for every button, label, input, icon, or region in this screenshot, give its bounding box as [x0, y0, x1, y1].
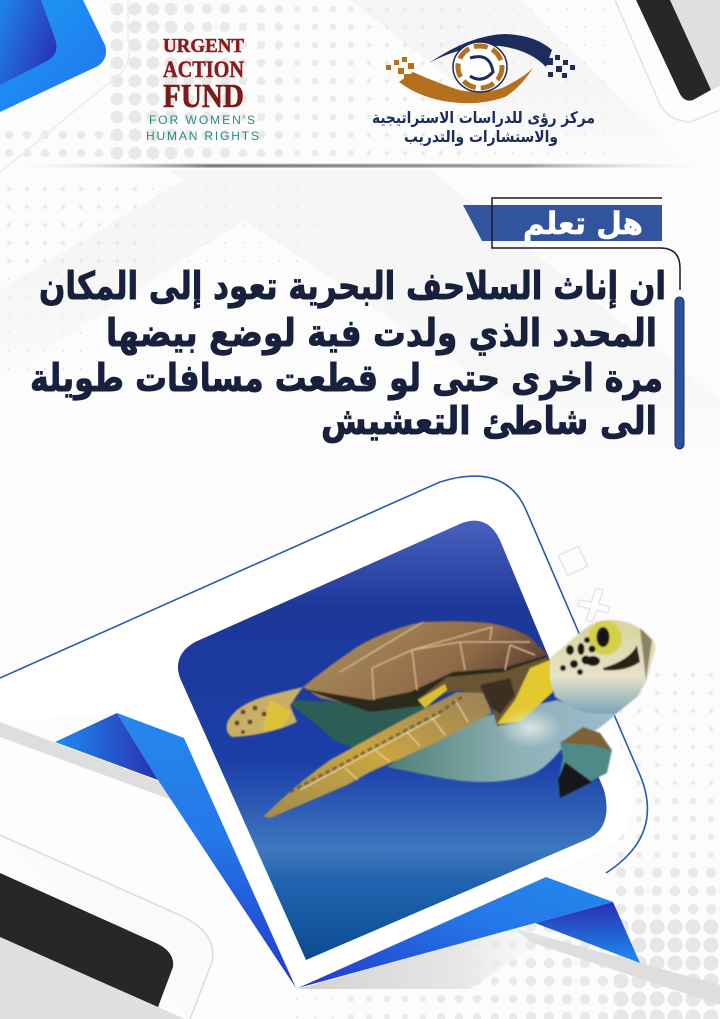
logo caption [372, 108, 595, 146]
logo: Urgent Action Fund [146, 35, 259, 143]
decorative outline shapes [558, 546, 610, 622]
logo: Urgent Action Fund: ACTION [163, 57, 244, 82]
belly [387, 700, 617, 782]
heading banner: did you know: هل تعلم [523, 206, 643, 242]
right blue folds [298, 877, 640, 988]
far front flipper [558, 727, 612, 798]
background diagonal bands [0, 0, 720, 460]
head [550, 620, 655, 714]
shell [303, 621, 548, 712]
logo: Urgent Action Fund: URGENT [163, 35, 245, 57]
logo: Urgent Action Fund: HUMAN RIGHTS [146, 129, 259, 143]
left blue folds [55, 713, 296, 988]
logo caption: مركز رؤى للدراسات الاستراتيجية [372, 108, 595, 127]
top-right corner shape [615, 0, 720, 122]
logo: Urgent Action Fund: FUND [163, 78, 244, 115]
logo: Urgent Action Fund: FOR WOMEN'S [149, 113, 255, 127]
white photo frame [0, 476, 633, 988]
front flipper [263, 692, 492, 818]
hind body underside [285, 700, 440, 748]
photo panel: blue sea [178, 521, 607, 960]
bottom-left white panel and dark shape [0, 737, 296, 1019]
turtle illustration [227, 620, 655, 818]
frame shadow [298, 927, 560, 989]
header divider shadow [0, 164, 700, 168]
main text block: الى شاطئ التعشيش [321, 399, 657, 443]
heading banner: did you know [463, 198, 680, 290]
main text block [30, 264, 666, 443]
logo caption: والاستشارات والتدريب [404, 127, 558, 146]
gray diagonal bands [0, 722, 720, 1005]
vertical blue accent bar [675, 297, 684, 449]
top-left blue corner shape [0, 0, 129, 172]
rear flipper [227, 687, 303, 737]
neck and shoulder [417, 657, 562, 748]
frame blue outline [0, 476, 647, 873]
logo: Roaa centre eye [386, 34, 575, 103]
